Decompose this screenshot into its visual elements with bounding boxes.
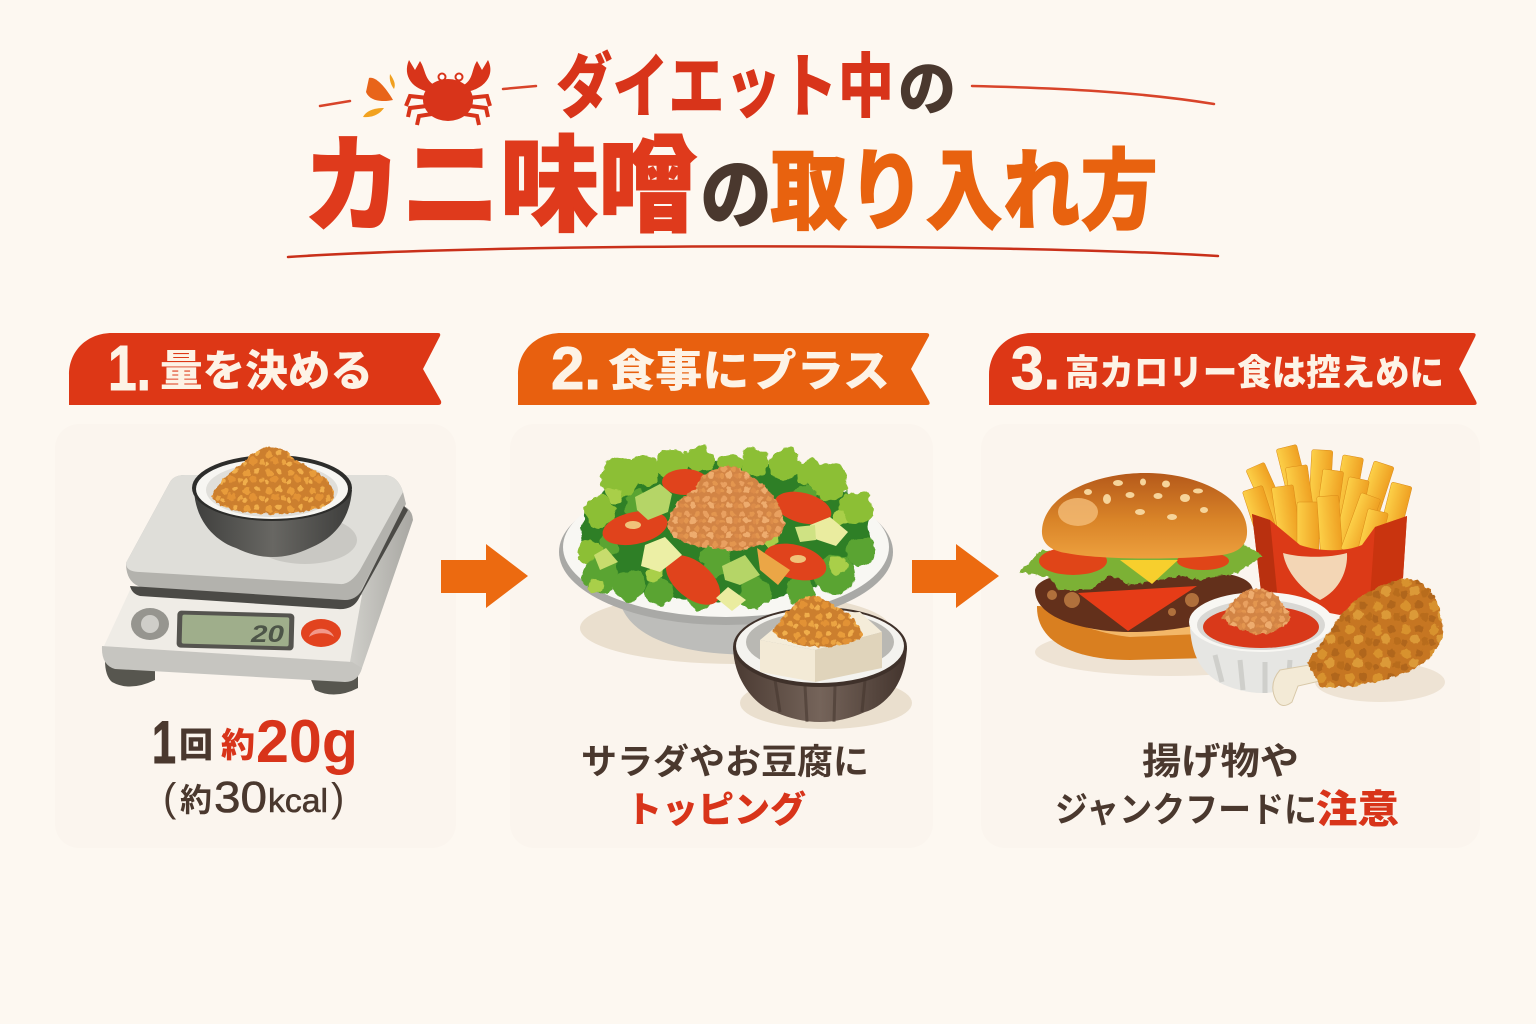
scale base panel xyxy=(104,590,362,662)
burger top bun xyxy=(1042,473,1247,559)
plate base xyxy=(622,608,860,655)
calorie note: 約 xyxy=(180,775,212,821)
spark icon xyxy=(363,74,395,117)
fries xyxy=(1242,444,1412,563)
caption line 2: ジャンクフードに xyxy=(1055,782,1317,833)
plate shadow under bowl xyxy=(253,516,357,564)
step 3 heading ribbon xyxy=(989,333,1477,405)
icon: kitchen scale with miso bowl xyxy=(102,447,413,695)
scale top plate xyxy=(126,475,406,600)
bowl ridges xyxy=(775,680,865,722)
calorie note xyxy=(163,773,344,822)
dip bowl xyxy=(1190,628,1333,693)
step 2 heading ribbon xyxy=(518,333,930,405)
small bowl xyxy=(194,490,352,557)
caption line 2 highlight: トッピング xyxy=(626,781,806,833)
chicken bone xyxy=(1273,664,1324,706)
cheese xyxy=(1120,560,1178,584)
burger bottom bun xyxy=(1037,606,1210,660)
approx character: 約 xyxy=(221,718,255,767)
caption highlight: 注意 xyxy=(1316,779,1399,835)
crab miso in bowl xyxy=(211,447,335,514)
burger sauce xyxy=(1040,600,1200,637)
icon: burger, fries and fried chicken xyxy=(1020,444,1445,706)
tomato seeds xyxy=(625,521,806,563)
plate xyxy=(559,479,893,625)
calorie note: ( xyxy=(163,776,177,820)
step 3 heading text: 高カロリー食は控えめに xyxy=(1065,344,1444,396)
step 1 heading text: 量を決める xyxy=(160,337,373,399)
decorative crab icon xyxy=(406,60,490,125)
scale display: 20 xyxy=(250,621,285,648)
kaisuu character: 回 xyxy=(179,718,213,767)
step 2 number: 2. xyxy=(551,335,601,402)
scale red button xyxy=(301,619,341,647)
crab miso on salad xyxy=(668,466,784,551)
title accent lines xyxy=(288,86,1218,257)
caption line 1: サラダやお豆腐に xyxy=(581,734,869,785)
lettuce layer xyxy=(1020,542,1263,590)
crab miso in dip xyxy=(1222,589,1290,634)
burger patty xyxy=(1035,571,1253,632)
calorie note: kcal xyxy=(268,782,328,819)
fries box xyxy=(1252,514,1407,615)
burger tomato slices xyxy=(1039,547,1229,575)
plate shadow xyxy=(580,592,890,664)
scale display xyxy=(177,610,294,651)
tomato slices xyxy=(599,469,835,614)
bun highlight xyxy=(1058,498,1098,526)
scale base front xyxy=(102,646,362,682)
fried chicken xyxy=(1307,578,1443,687)
tofu xyxy=(760,612,882,682)
calorie note: ) xyxy=(331,776,344,820)
panel: step 1 card xyxy=(55,424,456,848)
title xyxy=(288,31,1218,257)
title line 2 particle: の xyxy=(700,133,772,245)
arrow: step 1 to 2 xyxy=(441,544,528,608)
dip bowl ridges xyxy=(1215,655,1290,693)
panel: step 3 card xyxy=(981,424,1480,848)
title line 2 how to: 取り入れ方 xyxy=(770,121,1158,248)
title line 1: ダイエット中 xyxy=(556,31,894,132)
cucumber and avocado cubes xyxy=(594,484,848,611)
scale left button xyxy=(131,608,169,640)
step 3 number: 3. xyxy=(1011,335,1060,402)
title line 2 crab miso: カニ味噌 xyxy=(303,100,697,254)
fries box emblem xyxy=(1283,553,1347,600)
title line 1 particle: の xyxy=(898,41,956,128)
arrow: step 2 to 3 xyxy=(912,544,999,608)
calorie note: 30 xyxy=(214,773,267,822)
step 1 heading ribbon xyxy=(69,332,441,405)
step 3 caption xyxy=(1055,731,1399,835)
tofu bowl xyxy=(733,648,907,722)
20g amount: 20g xyxy=(256,708,358,775)
scale base side xyxy=(340,505,413,681)
patty highlights xyxy=(1047,590,1199,616)
red sauce triangle xyxy=(1078,586,1197,631)
crab miso on tofu xyxy=(773,596,863,647)
icon: salad plate with tofu bowl xyxy=(559,446,912,729)
scale plate underside shadow xyxy=(130,506,408,609)
dip sauce xyxy=(1203,606,1319,648)
sesame seeds xyxy=(1084,478,1208,520)
step 1 number: 1. xyxy=(108,332,151,404)
panel: step 2 card xyxy=(510,424,933,848)
step 2 heading text: 食事にプラス xyxy=(608,335,890,399)
tofu bowl shadow xyxy=(740,677,912,729)
caption line 1: 揚げ物や xyxy=(1142,731,1299,785)
lettuce xyxy=(578,446,874,611)
step 2 caption xyxy=(581,734,869,833)
step 1 caption xyxy=(152,708,358,822)
food shadow xyxy=(1035,628,1305,676)
one serving: 1 xyxy=(152,709,176,776)
scale feet xyxy=(105,660,358,695)
